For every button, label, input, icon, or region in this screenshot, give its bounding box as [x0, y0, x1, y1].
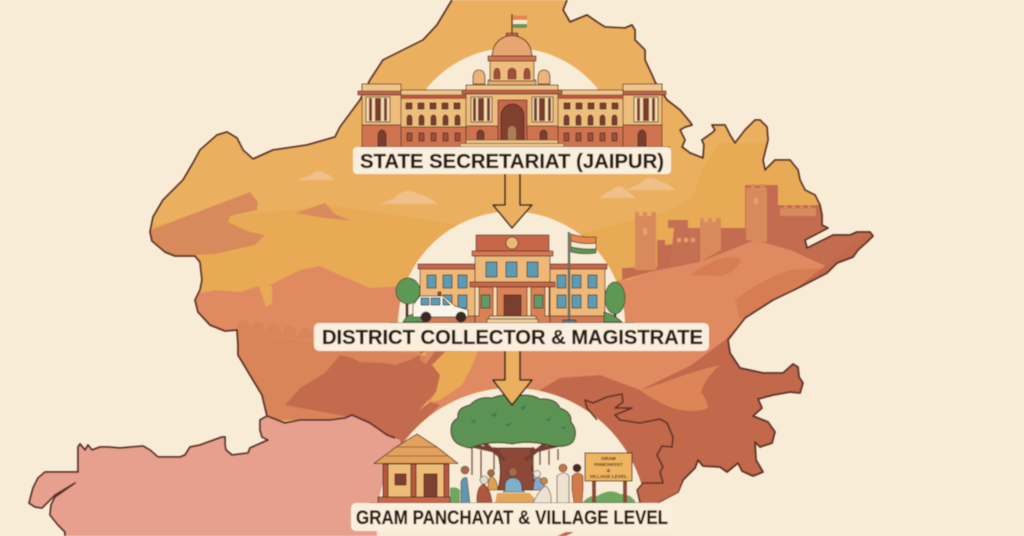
bushes: [450, 487, 636, 503]
small dune: [296, 203, 352, 221]
building: state secretariat: [358, 14, 670, 147]
rust central: [376, 351, 444, 444]
thatched hut: [374, 434, 458, 503]
dune east: [628, 240, 825, 293]
label: gram panchayat: [351, 503, 673, 531]
gold central patch: [430, 351, 478, 402]
cream circle behind secretariat: [427, 48, 597, 100]
banyan tree: [451, 395, 575, 490]
clouds: [297, 171, 675, 204]
tower windows: [643, 198, 758, 242]
villagers seated and standing: [461, 464, 583, 503]
arrow: secretariat to collector: [493, 174, 532, 228]
cream circle behind collector office: [398, 212, 625, 325]
building: district collector office: [396, 232, 625, 323]
ground line: collector: [389, 322, 635, 324]
fortress walls: [622, 184, 870, 280]
fort ridge: [286, 350, 426, 420]
notch outline repaint: [585, 394, 673, 503]
dune left: [145, 192, 265, 256]
signboard: VILLAGE LEVEL: [590, 474, 627, 480]
rust fill next to notch: [637, 446, 683, 503]
highlights in canopy: [470, 405, 566, 429]
arrow: collector to gram panchayat: [493, 351, 532, 405]
signboard: &: [607, 468, 611, 474]
orange patch in rust: [640, 365, 720, 411]
label: gram panchayat: GRAM PANCHAYAT & VILLAGE LEVEL: [356, 508, 668, 529]
ramparts west: [238, 330, 239, 332]
label: state secretariat: STATE SECRETARIAT (JAIPUR): [360, 151, 664, 173]
illustration: village scene: [369, 395, 642, 503]
darker gold east and middle band: [152, 144, 818, 292]
signboard: [585, 453, 632, 503]
cream circle behind village: [377, 388, 647, 536]
signboard: GRAM: [601, 456, 616, 462]
fort block with windows: [668, 220, 690, 244]
dune patches: [690, 257, 825, 320]
signboard: PANCHAYAT: [594, 462, 623, 468]
label: district collector: DISTRICT COLLECTOR & MAGISTRATE: [322, 327, 703, 349]
eastern rust region: [540, 266, 830, 484]
rust sliver bottom: [557, 532, 574, 536]
pink southern region: [30, 416, 402, 536]
meeting mat: [495, 493, 538, 503]
merlons east: [780, 205, 816, 216]
gold drip: [258, 284, 272, 307]
terracotta hills: [196, 266, 420, 355]
lower west plains: [239, 337, 426, 420]
fortress towers: [635, 184, 767, 270]
terracotta central and east underlay: [425, 280, 724, 416]
